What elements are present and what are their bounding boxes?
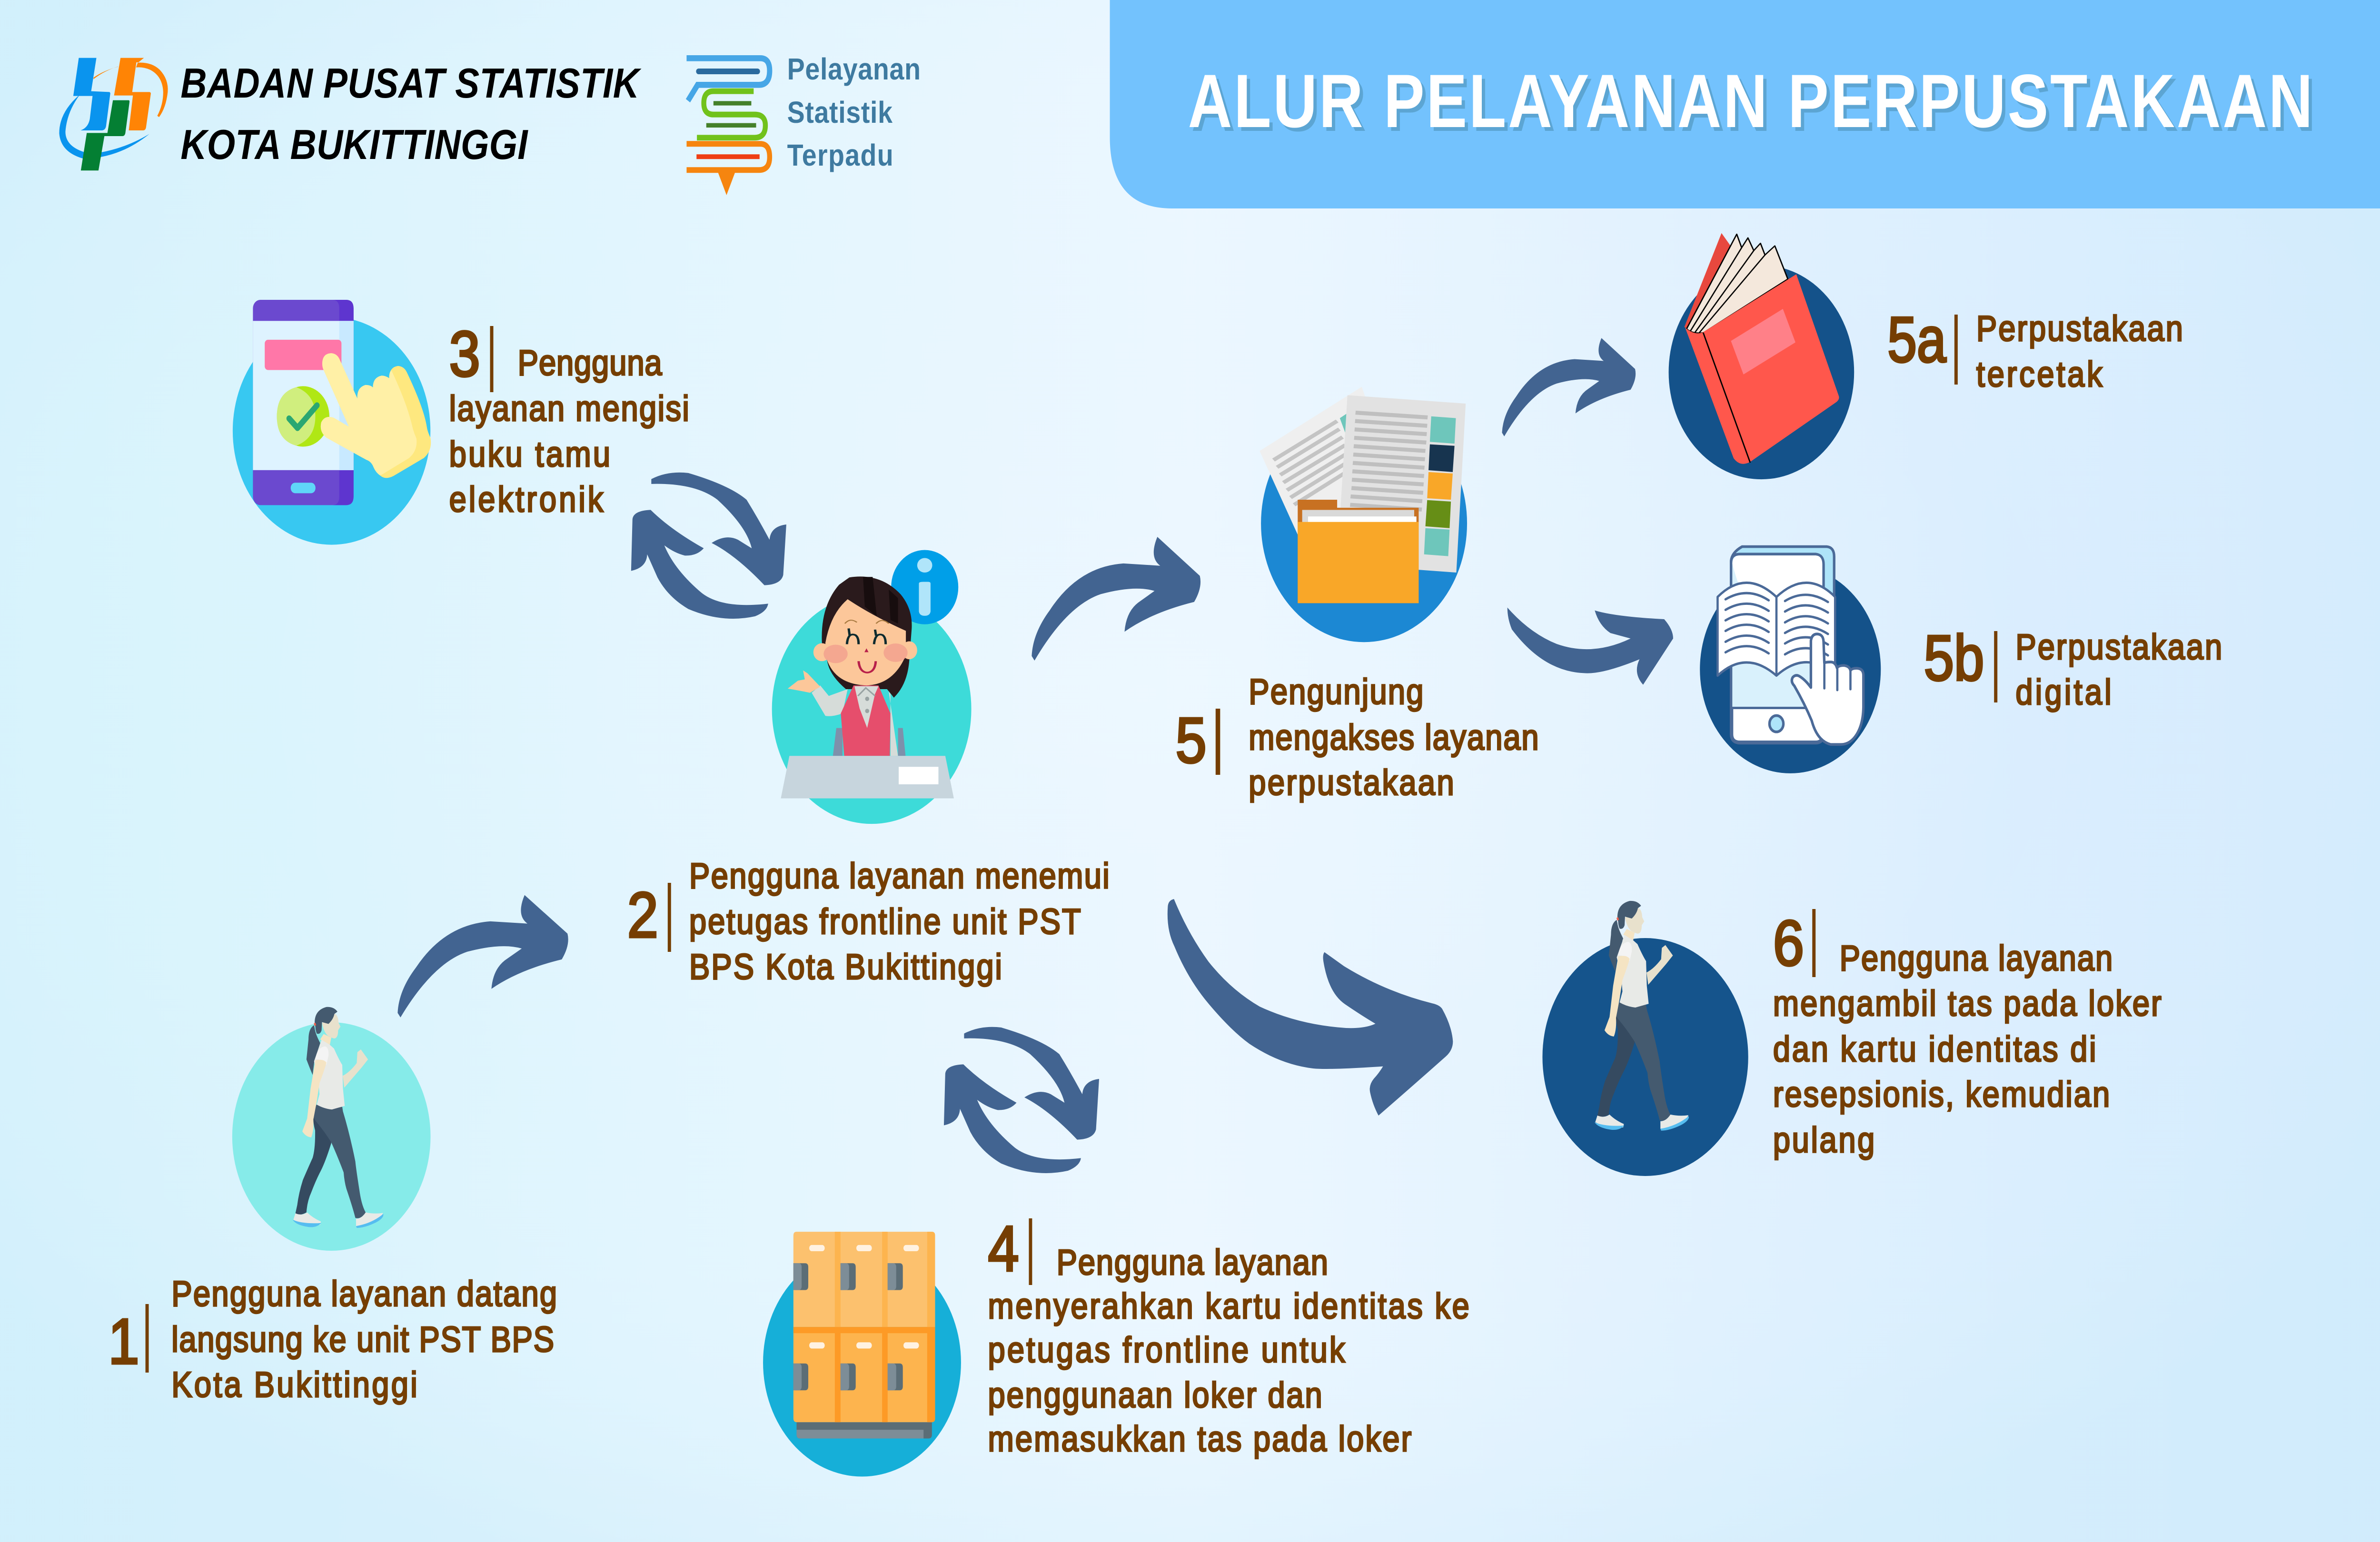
step 1 text — [108, 1274, 557, 1404]
step 4 text: Pengguna layanan — [1057, 1242, 1328, 1282]
step 6 text: Pengguna layanan — [1840, 938, 2112, 978]
arrow: step 2 to step 5 — [1031, 537, 1200, 661]
step 5 text: perpustakaan — [1249, 762, 1454, 802]
step 5b text — [1924, 622, 2222, 712]
icon: visitor leaving (step 6) — [1542, 901, 1748, 1176]
organisation name: KOTA BUKITTINGGI — [180, 121, 528, 168]
step 3 text: buku tamu — [449, 434, 610, 474]
step 4 text: 4 — [988, 1213, 1019, 1285]
PST label: Statistik — [787, 95, 893, 129]
step 4 text — [988, 1213, 1469, 1459]
title: ALUR PELAYANAN PERPUSTAKAAN — [1191, 62, 2316, 147]
step 6 text: 6 — [1773, 907, 1804, 979]
step 3 text: layanan mengisi — [449, 388, 689, 428]
step 1 text: langsung ke unit PST BPS — [171, 1319, 554, 1359]
step 5 text: Pengunjung — [1249, 672, 1423, 712]
header banner — [1110, 0, 2380, 208]
step 6 text: mengambil tas pada loker — [1773, 983, 2162, 1023]
step 2 text: petugas frontline unit PST — [689, 901, 1081, 941]
arrow: step 5 to 5b — [1507, 608, 1673, 685]
PST label: Terpadu — [787, 138, 893, 172]
step 5 text: 5 — [1176, 704, 1207, 776]
step 6 text: dan kartu identitas di — [1773, 1029, 2096, 1069]
step 4 text: penggunaan loker dan — [988, 1375, 1322, 1415]
step 5 text — [1176, 672, 1539, 802]
step 1 text: Kota Bukittinggi — [171, 1364, 417, 1404]
step 5a text: 5a — [1887, 304, 1946, 376]
step 3 text: elektronik — [449, 479, 604, 519]
arrows: step 2 and step 4 exchange — [944, 1027, 1099, 1173]
step 6 text: resepsionis, kemudian — [1773, 1074, 2110, 1114]
organisation name — [180, 60, 642, 168]
step 5b text: 5b — [1924, 622, 1984, 694]
step 5b text: Perpustakaan — [2015, 627, 2222, 667]
arrow: step 2 to step 6 — [1168, 899, 1453, 1116]
PST label: Pelayanan — [787, 52, 921, 86]
step 4 text: petugas frontline untuk — [988, 1330, 1345, 1370]
arrow: step 5 to 5a — [1502, 338, 1636, 436]
PST label — [787, 52, 921, 172]
step 6 text: pulang — [1773, 1120, 1874, 1160]
step 2 text: BPS Kota Bukittinggi — [689, 947, 1002, 987]
step 1 text: Pengguna layanan datang — [171, 1274, 557, 1314]
step 5a text: tercetak — [1976, 354, 2102, 394]
step 3 text — [449, 318, 689, 519]
step 5a text — [1887, 304, 2183, 394]
icon: PST logo — [686, 58, 770, 195]
step 5a text: Perpustakaan — [1976, 308, 2183, 348]
icon: digital library (step 5b) — [1700, 547, 1881, 773]
step 5 text: mengakses layanan — [1249, 717, 1539, 757]
step 2 text: 2 — [627, 879, 658, 951]
icon: frontline officer (step 2) — [772, 550, 972, 824]
step 2 text — [627, 856, 1110, 987]
step 3 text: Pengguna — [518, 343, 662, 383]
organisation name: BADAN PUSAT STATISTIK — [180, 60, 642, 107]
step 1 text: 1 — [108, 1305, 139, 1377]
step 4 text: memasukkan tas pada loker — [988, 1419, 1411, 1459]
arrows: step 3 and step 2 exchange — [631, 473, 786, 619]
icon: phone guest book (step 3) — [233, 300, 431, 545]
step 5b text: digital — [2015, 672, 2112, 712]
icon: lockers (step 4) — [763, 1232, 961, 1477]
step 4 text: menyerahkan kartu identitas ke — [988, 1286, 1469, 1326]
icon: printed book (step 5a) — [1669, 233, 1854, 479]
title: ALUR PELAYANAN PERPUSTAKAAN — [1188, 59, 2313, 143]
step 3 text: 3 — [449, 318, 480, 390]
icon: BPS logo — [59, 58, 168, 170]
icon: visitor walking (step 1) — [232, 1007, 431, 1251]
arrow: step 1 to step 2 — [397, 895, 568, 1018]
icon: documents and folder (step 5) — [1259, 387, 1467, 642]
step 2 text: Pengguna layanan menemui — [689, 856, 1110, 896]
step 6 text — [1773, 907, 2162, 1160]
